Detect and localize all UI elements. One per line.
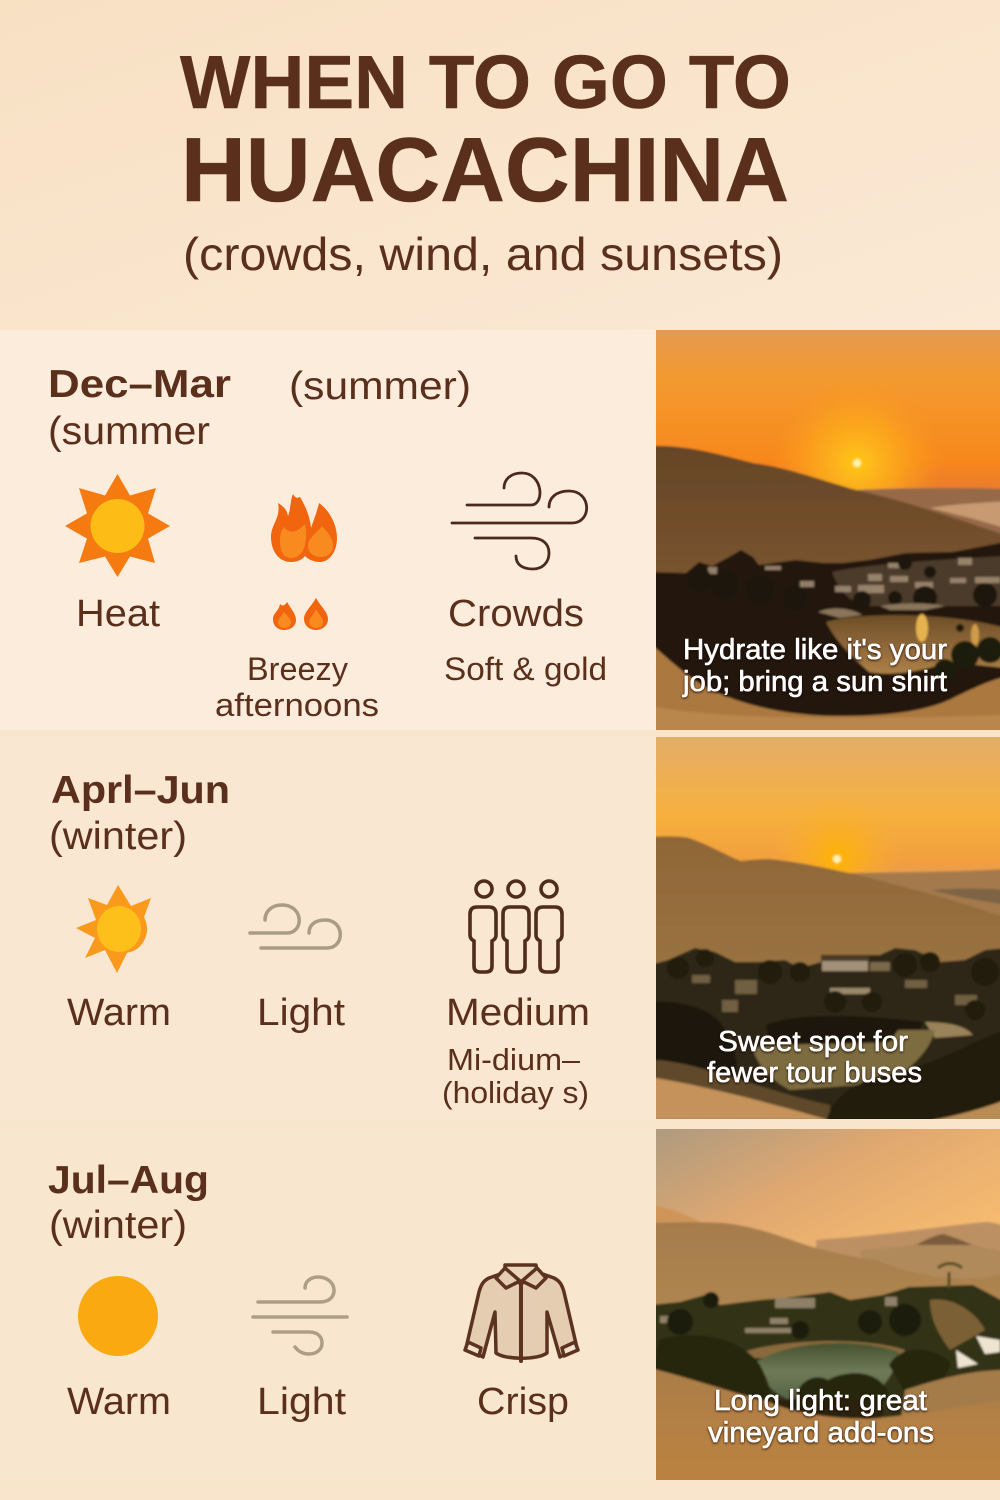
icon: shirt (465, 1265, 578, 1361)
label: Breezy afternoons: Breezy (247, 651, 348, 687)
label: Crowds: Crowds (448, 593, 584, 635)
heading note: summer: (summer) (289, 365, 471, 408)
note: holiday: Mi-dium– (447, 1042, 581, 1077)
icon: hot sun (65, 474, 170, 577)
icon: flames (271, 494, 337, 562)
caption: Dec–Mar: job; bring a sun shirt (682, 666, 947, 698)
panel: Jul–Aug (0, 1130, 656, 1480)
title line 1: WHEN TO GO TO (180, 40, 791, 124)
panel: Dec–Mar (0, 330, 656, 730)
label: Medium: Medium (446, 992, 590, 1034)
photo: Jul–Aug afternoon over oasis (650, 1125, 1000, 1485)
subheading: winter: (winter) (49, 815, 187, 858)
icon: three people (470, 881, 562, 972)
subheading: winter: (winter) (49, 1204, 187, 1247)
caption: Dec–Mar (682, 634, 947, 698)
caption: Jul–Aug (708, 1385, 934, 1449)
caption: April–Jun: Sweet spot for (718, 1026, 908, 1058)
icon: small flames (273, 598, 328, 630)
heading: Dec–Mar: Dec–Mar (48, 363, 231, 406)
label: Soft & gold: Soft & gold (444, 651, 607, 687)
panel: April–Jun (0, 737, 656, 1120)
heading: Jul–Aug: Jul–Aug (48, 1159, 209, 1202)
icon: wind (452, 473, 587, 569)
photo: April–Jun dusk over oasis (650, 732, 1000, 1125)
label: Crisp: Crisp (477, 1381, 569, 1423)
note: holiday (442, 1042, 589, 1110)
heading: Aprl–Jun: Aprl–Jun (51, 769, 230, 812)
label: Heat: Heat (76, 593, 160, 635)
label: Breezy afternoons (215, 651, 379, 723)
label: Warm: Warm (67, 992, 171, 1034)
caption: Dec–Mar: Hydrate like it's your (683, 634, 947, 666)
icon: mild sun (78, 1276, 158, 1356)
subheading: summer: (summer (48, 410, 210, 453)
caption: April–Jun (706, 1030, 922, 1086)
label: Light: Light (257, 1381, 346, 1423)
caption: April–Jun: fewer tour buses (707, 1057, 922, 1089)
icon: warm sun (76, 885, 151, 973)
label: Light: Light (257, 992, 345, 1034)
photo: Dec–Mar sunset over oasis (650, 325, 1000, 740)
title line 2: HUACACHINA (181, 120, 789, 221)
note: holiday: (holiday s) (442, 1075, 589, 1110)
label: Breezy afternoons: afternoons (215, 687, 379, 723)
label: Warm: Warm (67, 1381, 171, 1423)
title block (180, 40, 791, 280)
subtitle: (crowds, wind, and sunsets) (183, 228, 783, 280)
caption: Jul–Aug: vineyard add-ons (708, 1417, 934, 1449)
icon: light wind (250, 905, 340, 948)
icon: light wind (253, 1277, 347, 1354)
caption: Jul–Aug: Long light: great (714, 1385, 927, 1417)
